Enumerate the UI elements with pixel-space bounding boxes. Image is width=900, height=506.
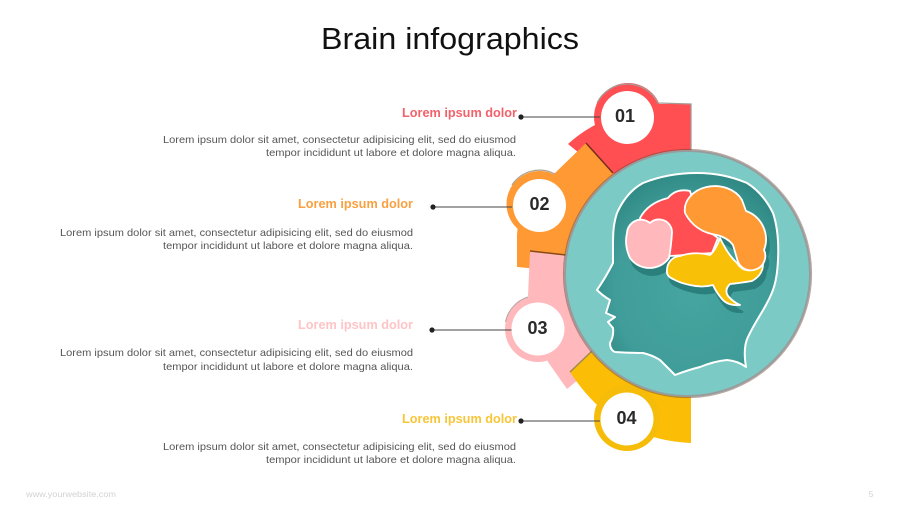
- connector 3: [429, 327, 512, 333]
- badge 04: [600, 392, 654, 446]
- title: Brain infographics: [321, 21, 579, 56]
- badge 03: 03: [527, 318, 548, 338]
- description 2: tempor incididunt ut labore et dolore magna aliqua.: [163, 240, 413, 252]
- text block 4: [163, 412, 517, 466]
- text block 2: [60, 197, 413, 252]
- label 1: Lorem ipsum dolor: [402, 106, 517, 120]
- brain shadow: [629, 193, 769, 312]
- footer website: www.yourwebsite.com: [25, 489, 116, 499]
- big teal circle with head and brain: [564, 150, 812, 398]
- text block 3: [60, 318, 413, 373]
- text block 1: [163, 106, 517, 159]
- badge 04: 04: [616, 408, 637, 428]
- description 2: Lorem ipsum dolor sit amet, consectetur adipisicing elit, sed do eiusmod: [60, 227, 413, 239]
- description 1: Lorem ipsum dolor sit amet, consectetur adipisicing elit, sed do eiusmod: [163, 134, 516, 146]
- description 1: tempor incididunt ut labore et dolore magna aliqua.: [266, 147, 516, 159]
- footer page number: 5: [869, 489, 874, 499]
- description 4: tempor incididunt ut labore et dolore magna aliqua.: [266, 454, 516, 466]
- sector 04 yellow: [570, 351, 691, 451]
- connector 4: [518, 418, 600, 424]
- connector 1: [518, 114, 600, 120]
- label 2: Lorem ipsum dolor: [298, 197, 413, 211]
- badge 02: 02: [529, 194, 550, 214]
- badge 03: [512, 302, 564, 356]
- sector 03 pink: [505, 251, 620, 389]
- label 3: Lorem ipsum dolor: [298, 318, 413, 332]
- badge 01: 01: [615, 106, 635, 126]
- badge 01: [601, 91, 654, 144]
- head silhouette: [597, 173, 778, 375]
- description 3: tempor incididunt ut labore et dolore magna aliqua.: [163, 361, 413, 373]
- label 4: Lorem ipsum dolor: [402, 412, 517, 426]
- brain lobe: red: [640, 190, 718, 256]
- sector 01 red: [568, 83, 691, 185]
- brain lobe: pink: [626, 219, 672, 268]
- brain lobe: yellow: [667, 238, 763, 305]
- description 4: Lorem ipsum dolor sit amet, consectetur adipisicing elit, sed do eiusmod: [163, 441, 516, 453]
- description 3: Lorem ipsum dolor sit amet, consectetur adipisicing elit, sed do eiusmod: [60, 347, 413, 359]
- brain lobe: orange: [685, 186, 766, 270]
- badge 02: [513, 179, 566, 232]
- sector 02 orange: [506, 143, 625, 270]
- connector 2: [430, 204, 512, 210]
